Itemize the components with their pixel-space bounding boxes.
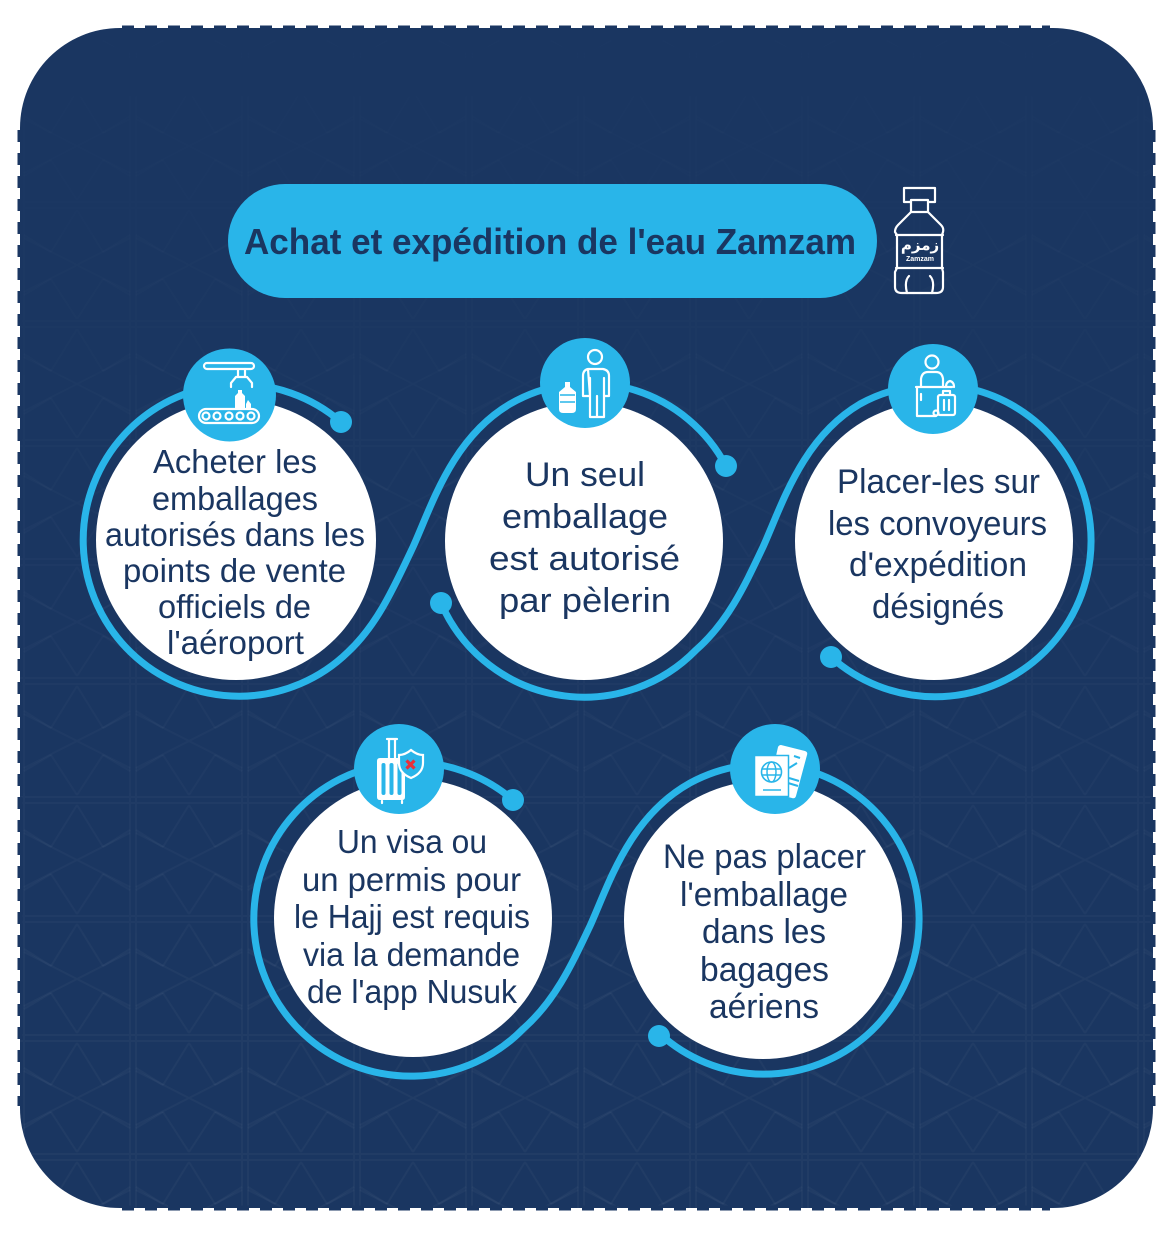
text step 4: Un visa ou xyxy=(337,823,487,860)
text step 3 xyxy=(828,463,1047,626)
end dot 5 xyxy=(648,1025,670,1047)
text step 3: désignés xyxy=(872,588,1004,626)
text step 4: un permis pour xyxy=(302,861,521,898)
text step 1: autorisés dans les xyxy=(105,516,365,553)
icon: Zamzam bottle xyxy=(895,188,943,293)
icon: Zamzam bottle: Zamzam xyxy=(906,256,934,263)
icon: suitcase with shield xyxy=(354,724,444,814)
text step 5: l'emballage xyxy=(680,876,848,914)
text step 5: dans les xyxy=(702,913,826,951)
white circle 1 xyxy=(96,400,376,680)
end dot 4 xyxy=(502,789,524,811)
text step 1: points de vente xyxy=(123,552,346,589)
end dot 2b xyxy=(430,592,452,614)
title banner: Achat et expédition de l'eau Zamzam xyxy=(244,221,856,262)
text step 1: l'aéroport xyxy=(167,624,304,661)
white circle 2 xyxy=(445,402,723,680)
text step 2: emballage xyxy=(502,498,668,536)
white circle 4 xyxy=(274,779,552,1057)
white circle 3 xyxy=(795,402,1073,680)
text step 4: de l'app Nusuk xyxy=(307,973,517,1010)
connector ring 4 to 5 xyxy=(254,762,919,1076)
end dot 3 xyxy=(820,646,842,668)
text step 2: Un seul xyxy=(525,456,645,494)
text step 4: le Hajj est requis xyxy=(294,898,530,935)
connector ring 2 to 3 xyxy=(441,385,1091,697)
text step 3: Placer-les sur xyxy=(837,463,1040,501)
step 5: no air baggage xyxy=(624,724,902,1059)
text step 1: emballages xyxy=(152,480,318,517)
text step 5: bagages xyxy=(700,951,829,989)
step 3: conveyors xyxy=(795,344,1073,680)
text step 4 xyxy=(294,823,530,1010)
text step 5: Ne pas placer xyxy=(663,838,866,876)
icon: pilgrim with water xyxy=(540,338,630,428)
text step 2: par pèlerin xyxy=(499,582,671,620)
step 2: one package per pilgrim xyxy=(430,338,1091,697)
text step 3: d'expédition xyxy=(849,546,1027,584)
text step 1: officiels de xyxy=(158,588,311,625)
connector ring 1 to 2 xyxy=(83,383,726,696)
icon: conveyor belt xyxy=(183,348,276,442)
text step 3: les convoyeurs xyxy=(828,505,1047,543)
icon: passport and ticket xyxy=(730,724,820,814)
text step 5: aériens xyxy=(709,988,819,1026)
text step 5 xyxy=(663,838,866,1026)
end dot 2a xyxy=(715,455,737,477)
title banner xyxy=(228,184,877,298)
end dot 1 xyxy=(330,411,352,433)
icon: Zamzam bottle: زمزم xyxy=(901,236,939,254)
step 1: buy packaging xyxy=(83,348,726,696)
text step 1 xyxy=(105,443,365,661)
text step 2 xyxy=(489,456,680,620)
text step 4: via la demande xyxy=(303,936,520,973)
step 4: visa or permit xyxy=(254,724,919,1076)
text step 1: Acheter les xyxy=(153,443,317,480)
icon: check-in desk xyxy=(888,344,978,434)
white circle 5 xyxy=(624,781,902,1059)
text step 2: est autorisé xyxy=(489,540,680,578)
